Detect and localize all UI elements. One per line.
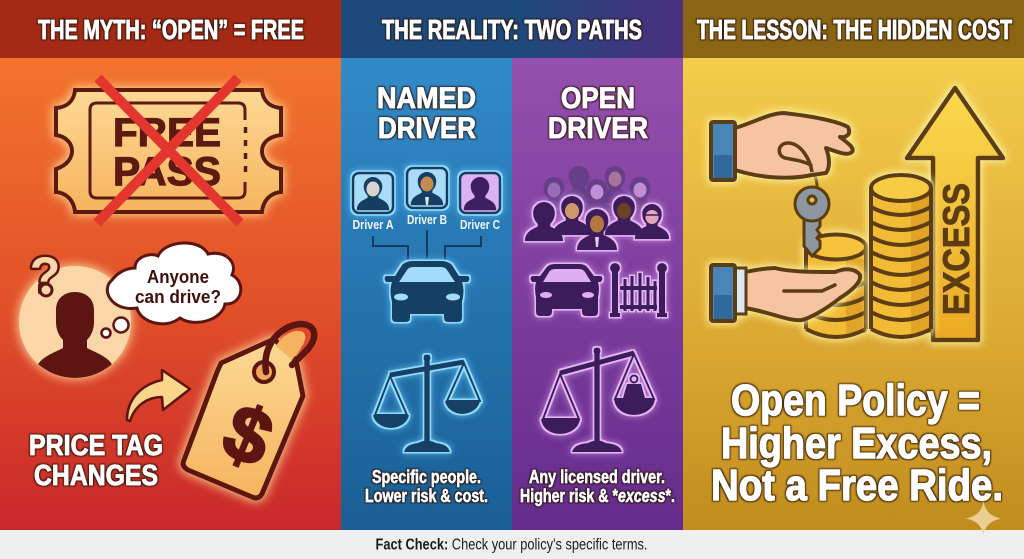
icon: crossed-out free pass ticket: FREE bbox=[113, 111, 221, 155]
background: lesson panel bbox=[683, 58, 1024, 530]
icon: balanced scales bbox=[373, 355, 480, 452]
icon: car, open driver bbox=[530, 264, 602, 316]
icon: three named drivers: Driver A bbox=[352, 218, 394, 232]
icon: three named drivers: Driver B bbox=[407, 213, 447, 227]
icon: crowd of any drivers bbox=[525, 166, 669, 250]
icon: crossed-out free pass ticket: PASS bbox=[113, 150, 221, 194]
background: open driver panel bbox=[512, 58, 683, 530]
footer band bbox=[0, 530, 1024, 559]
caption: open driver: Any licensed driver. bbox=[529, 466, 665, 487]
caption: open driver: Higher risk & *excess*. bbox=[520, 485, 675, 506]
heading: named driver: NAMED bbox=[377, 82, 476, 115]
icon: open gate bbox=[610, 264, 667, 315]
conclusion text bbox=[711, 376, 1003, 510]
icon: tipped scales with weight bbox=[541, 348, 655, 452]
icon: excess arrow: EXCESS bbox=[936, 183, 977, 315]
label: price tag changes: PRICE TAG bbox=[29, 430, 163, 462]
icon: short coin stack bbox=[806, 234, 866, 337]
icon: confused person with thought bubble: Anyone bbox=[147, 267, 209, 287]
icon: three named drivers bbox=[352, 168, 500, 260]
icon: tall coin stack bbox=[871, 175, 931, 337]
heading: open driver bbox=[548, 82, 648, 145]
icon: confused person with thought bubble: can drive? bbox=[135, 287, 221, 307]
icon: excess arrow bbox=[907, 88, 1003, 340]
icon: confused person with thought bubble bbox=[19, 243, 241, 382]
icon: price tag with dollar sign: $ bbox=[212, 386, 285, 484]
heading: open driver: OPEN bbox=[561, 82, 635, 115]
heading: open driver: DRIVER bbox=[548, 112, 648, 145]
header band: reality bbox=[341, 0, 683, 58]
label: price tag changes: CHANGES bbox=[34, 460, 158, 492]
background: myth panel bbox=[0, 58, 342, 530]
icon: key bbox=[795, 176, 829, 256]
icon: price tag with dollar sign bbox=[183, 324, 314, 498]
icon: lower open hand bbox=[711, 265, 860, 321]
background: named driver panel bbox=[341, 58, 512, 530]
icon: sparkle bbox=[966, 501, 1001, 536]
caption: open driver bbox=[520, 466, 675, 506]
caption: named driver: Lower risk & cost. bbox=[365, 485, 488, 506]
icon: crossed-out free pass ticket bbox=[56, 78, 281, 223]
icon: three named drivers: Driver C bbox=[460, 218, 500, 232]
heading: the myth: THE MYTH: “OPEN” = FREE bbox=[38, 14, 304, 45]
header band: myth bbox=[0, 0, 341, 58]
label: price tag changes bbox=[29, 430, 163, 492]
icon: car, named driver bbox=[384, 261, 470, 322]
icon: confused person with thought bubble: ? bbox=[30, 247, 60, 303]
caption: named driver: Specific people. bbox=[372, 466, 481, 487]
heading: named driver bbox=[377, 82, 476, 145]
header band: lesson bbox=[683, 0, 1024, 58]
footer: fact check note: Fact Check: Check your policy's specific terms. bbox=[376, 536, 648, 554]
conclusion text: Open Policy = bbox=[731, 376, 980, 425]
caption: named driver bbox=[365, 466, 488, 506]
icon: upper hand holding key bbox=[711, 113, 853, 180]
heading: the reality: THE REALITY: TWO PATHS bbox=[382, 14, 642, 45]
heading: named driver: DRIVER bbox=[378, 112, 476, 145]
arrow: curved to price tag bbox=[127, 370, 190, 421]
